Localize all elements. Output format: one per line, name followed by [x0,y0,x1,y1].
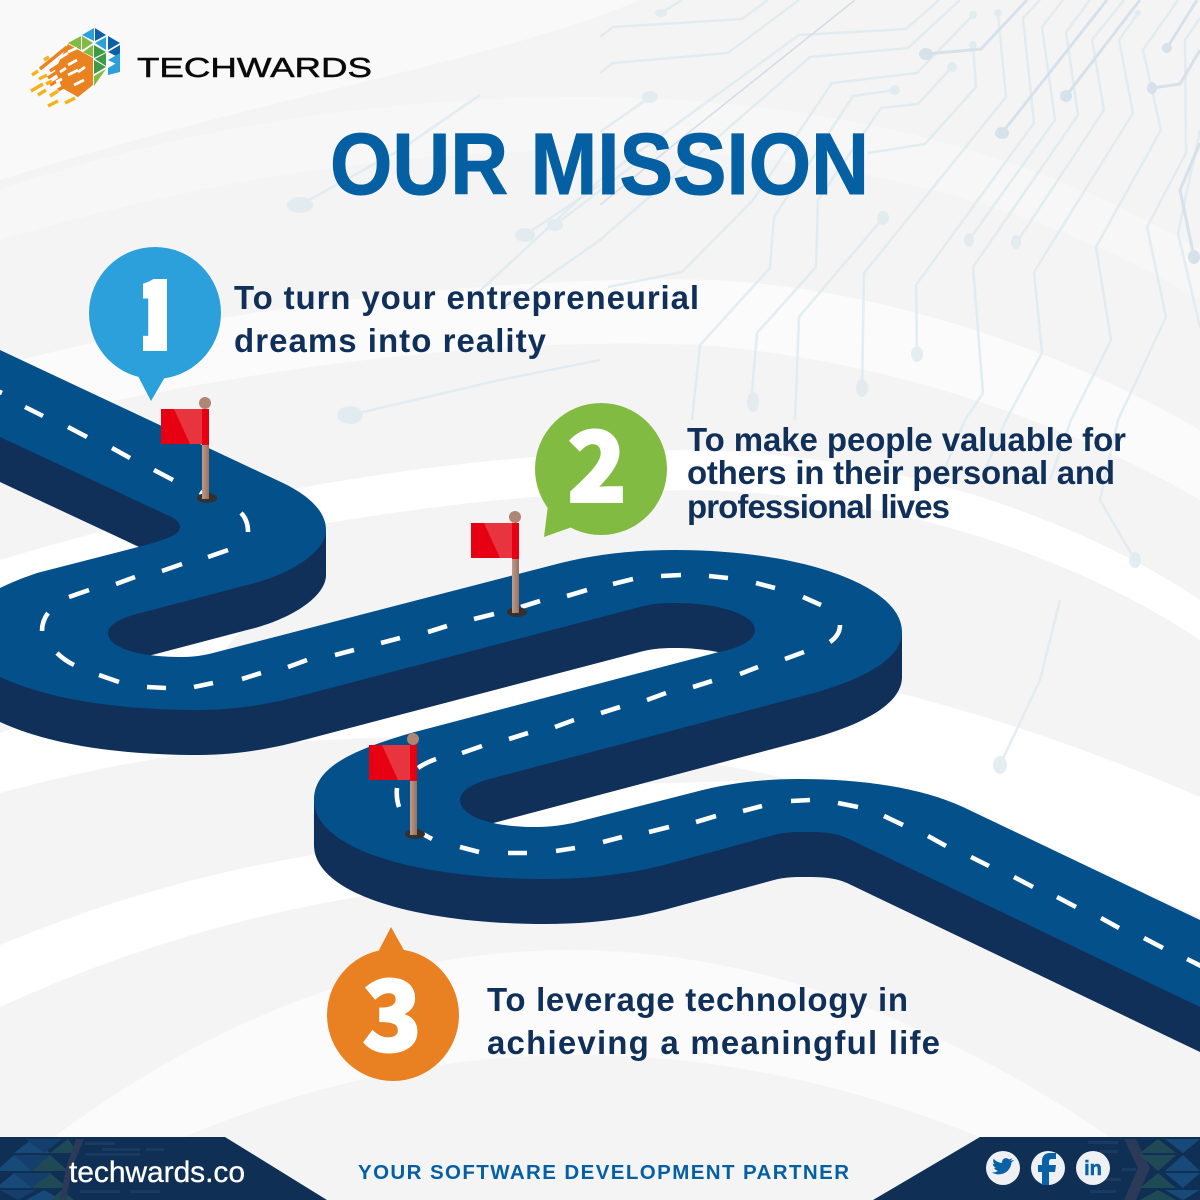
footer tagline: YOUR SOFTWARE DEVELOPMENT PARTNER [358,1161,849,1184]
flag 3 [369,733,425,839]
footer right pattern [1088,1139,1200,1200]
text: mission 2: To make people valuable for [687,421,1126,458]
text: mission 1: To turn your entrepreneurial [234,279,699,316]
marker 3: orange pin: 3 [362,938,422,1080]
text: mission 2: others in their personal and [687,454,1115,491]
flag 2 [471,511,527,617]
footer website: techwards.co [69,1156,245,1189]
icon: facebook [1031,1151,1065,1185]
footer left pattern [0,1139,164,1200]
flag 1 [161,397,217,503]
text: mission 2: professional lives [687,488,950,525]
marker 1: blue pin: 1 [126,238,186,380]
text: mission 3: To leverage technology in [487,981,908,1018]
text: mission 2 [687,421,1126,525]
logo wordmark: TECHWARDS [137,52,372,83]
title: OUR MISSION [330,116,869,213]
road surface [0,350,1200,1007]
icon: linkedin [1076,1151,1110,1185]
logo icon [31,28,120,106]
marker 2: green speech bubble [535,389,667,537]
icon: linkedin: in [1084,1158,1102,1180]
logo [31,28,372,106]
text: mission 1 [234,279,699,359]
winding road [0,350,1200,1052]
footer left panel [0,1137,327,1200]
text: mission 3 [487,981,940,1061]
marker 2: green speech bubble: 2 [567,389,627,531]
marker 1: blue pin [89,238,221,401]
marker 3: orange pin [327,927,459,1081]
road side wall [0,352,1200,1052]
icon: twitter [986,1151,1020,1185]
circuit board lines [287,0,1200,774]
circuit board dark traces [600,0,1200,264]
footer right panel [873,1137,1200,1200]
text: mission 1: dreams into reality [234,322,547,359]
road centre dashes [0,390,1200,968]
text: mission 3: achieving a meaningful life [487,1024,940,1061]
